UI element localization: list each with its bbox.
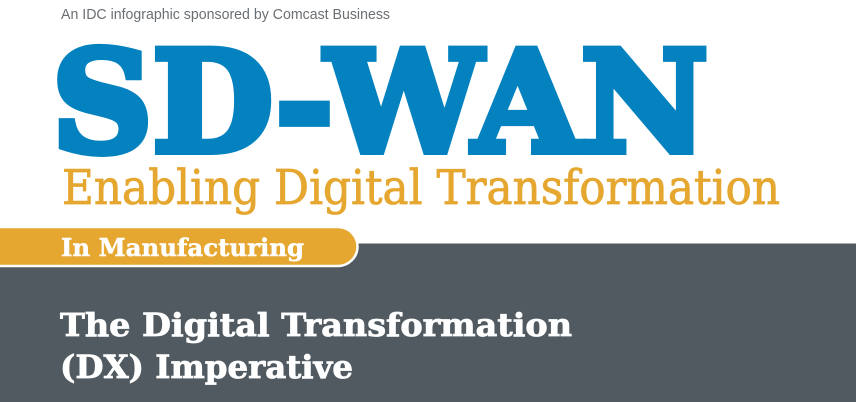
banner: In Manufacturing [0, 227, 358, 266]
banner: In Manufacturing: In Manufacturing [61, 233, 304, 262]
dark lower panel [0, 244, 856, 402]
sponsor line: An IDC infographic sponsored by Comcast Business [61, 6, 390, 23]
section heading: The Digital Transformation [60, 306, 572, 344]
section heading: (DX) Imperative [60, 348, 353, 386]
title: SD-WAN: SD-WAN [52, 20, 708, 184]
subtitle: Enabling Digital Transformation: Enabling Digital Transformation [62, 160, 780, 216]
section heading [60, 306, 572, 386]
